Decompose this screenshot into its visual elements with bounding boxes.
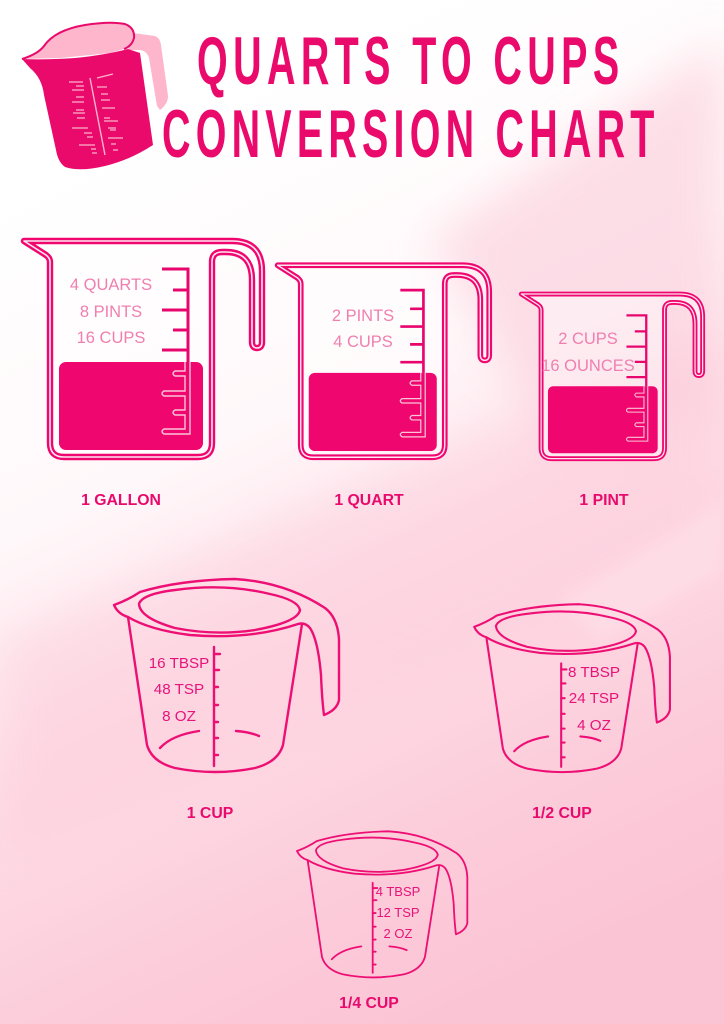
volume labels: 4 CUPS	[333, 333, 393, 351]
beaker: 1 gallon	[24, 241, 262, 457]
volume labels	[568, 664, 620, 734]
beaker: 1 pint	[521, 294, 703, 459]
label: 1 gallon: 1 GALLON	[81, 492, 161, 509]
volume labels: 8 TBSP	[568, 664, 620, 681]
volume labels: 2 CUPS	[558, 330, 618, 348]
measuring cup: 1 cup	[114, 579, 339, 772]
beaker: 1 quart	[278, 265, 489, 457]
volume labels: 2 OZ	[384, 926, 413, 941]
volume labels	[332, 307, 394, 351]
liquid	[59, 362, 203, 450]
volume labels	[541, 330, 635, 375]
volume labels	[149, 655, 209, 725]
volume labels: 48 TSP	[154, 681, 204, 698]
label: 1 quart: 1 QUART	[334, 492, 404, 509]
volume labels: 12 TSP	[376, 905, 420, 920]
icon: pink measuring jug	[22, 23, 168, 169]
label: 1/4 cup: 1/4 CUP	[339, 995, 399, 1012]
volume labels: 4 TBSP	[376, 884, 420, 899]
volume labels: 16 CUPS	[77, 329, 145, 347]
label: 1 cup: 1 CUP	[187, 805, 233, 822]
volume labels: 2 PINTS	[332, 307, 394, 325]
volume labels	[70, 276, 152, 347]
title: CONVERSION CHART	[162, 96, 660, 172]
title: QUARTS TO CUPS	[197, 23, 625, 99]
volume labels: 16 TBSP	[149, 655, 209, 672]
volume labels: 8 PINTS	[80, 303, 142, 321]
measuring cup: 1/2 cup	[474, 604, 670, 772]
volume labels: 4 OZ	[577, 717, 611, 734]
label: 1 pint: 1 PINT	[579, 492, 629, 509]
scale	[162, 269, 188, 362]
volume labels: 16 OUNCES	[541, 357, 635, 375]
volume labels	[376, 884, 420, 941]
volume labels: 24 TSP	[569, 690, 619, 707]
volume labels: 8 OZ	[162, 708, 196, 725]
title	[162, 23, 660, 172]
volume labels: 4 QUARTS	[70, 276, 152, 294]
label: 1/2 cup: 1/2 CUP	[532, 805, 592, 822]
measuring cup: 1/4 cup	[297, 831, 467, 977]
